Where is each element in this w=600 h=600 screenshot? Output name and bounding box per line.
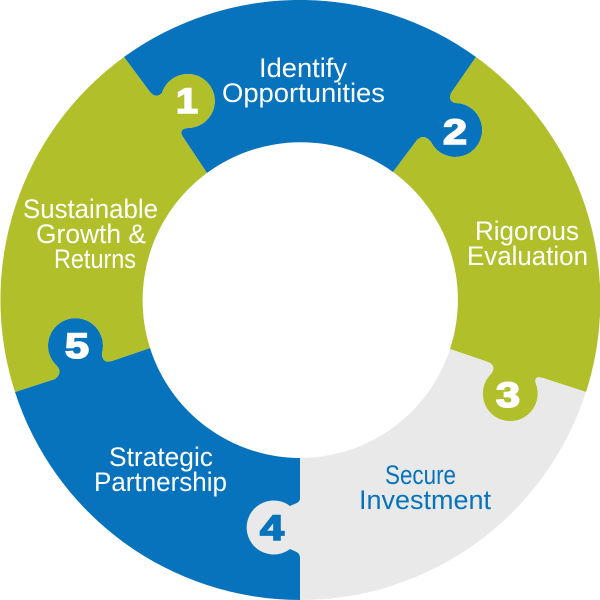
green puzzle piece 5: [0, 57, 215, 392]
segment 5: sustainable growth and returns: [0, 57, 215, 392]
label: Strategic Partnership: Partnership: [94, 467, 227, 497]
label: Secure Investment: Secure: [385, 460, 456, 490]
label: Identify Opportunities: Opportunities: [222, 78, 385, 108]
label: Sustainable Growth & Returns: Growth &: [36, 219, 146, 249]
label: Secure Investment: [359, 460, 491, 515]
label: Sustainable Growth & Returns: [23, 194, 158, 274]
number 5: 5: [65, 327, 89, 366]
blue puzzle piece 4: [15, 318, 300, 600]
label: Identify Opportunities: [222, 53, 385, 108]
number 4: 4: [260, 509, 285, 548]
label: Rigorous Evaluation: Rigorous: [475, 216, 579, 246]
label: Identify Opportunities: Identify: [259, 53, 347, 83]
label: Secure Investment: Investment: [359, 485, 491, 515]
number 2: 2: [443, 113, 467, 152]
label: Rigorous Evaluation: Evaluation: [467, 241, 588, 271]
grey puzzle piece 3: [247, 349, 586, 600]
label: Sustainable Growth & Returns: Sustainable: [23, 194, 158, 224]
label: Strategic Partnership: [94, 442, 227, 497]
segment 4: strategic partnership: [15, 318, 300, 600]
label: Strategic Partnership: Strategic: [109, 442, 213, 472]
segment 3: secure investment: [247, 349, 586, 600]
number 1: 1: [176, 82, 198, 121]
number 3: 3: [496, 376, 520, 415]
segment 1: identify opportunities: [124, 0, 482, 173]
green puzzle piece 2: [393, 57, 600, 421]
blue puzzle piece 1: [124, 0, 482, 173]
segment 2: rigorous evaluation: [393, 57, 600, 421]
label: Rigorous Evaluation: [467, 216, 588, 271]
label: Sustainable Growth & Returns: Returns: [54, 244, 136, 274]
